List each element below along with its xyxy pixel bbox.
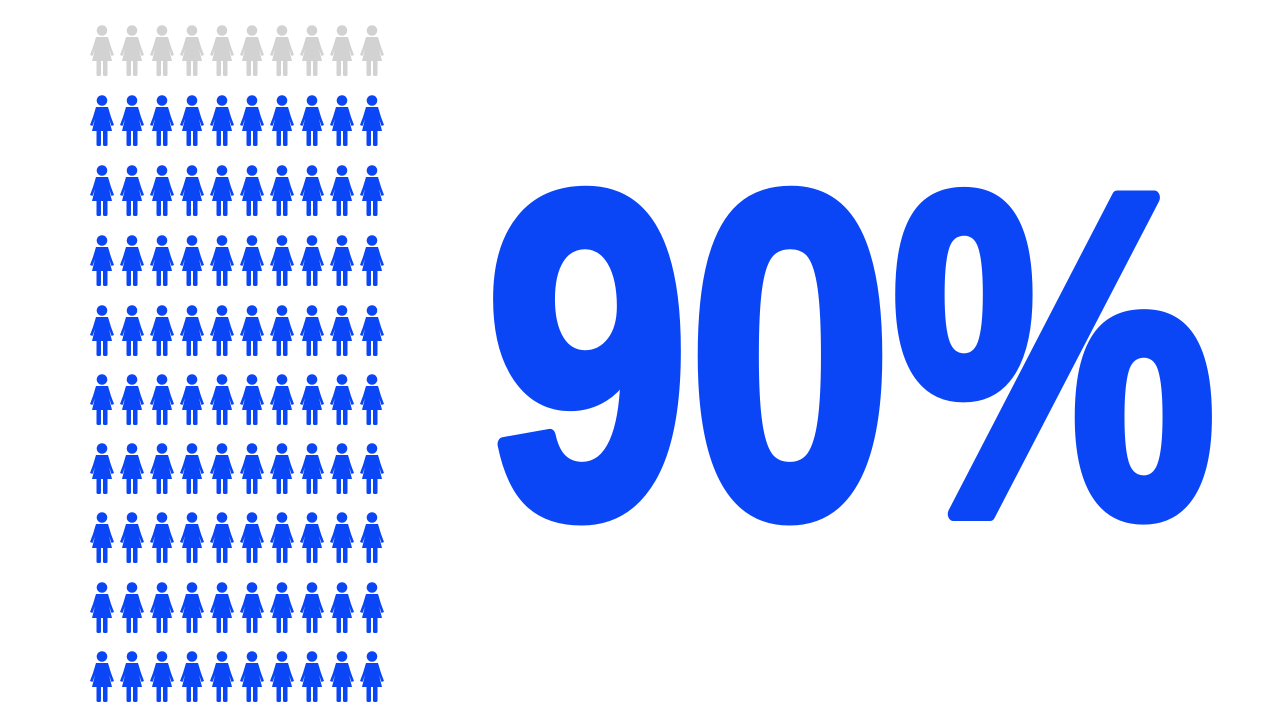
blue icons grid [90,95,384,702]
grey icons row [90,25,384,76]
